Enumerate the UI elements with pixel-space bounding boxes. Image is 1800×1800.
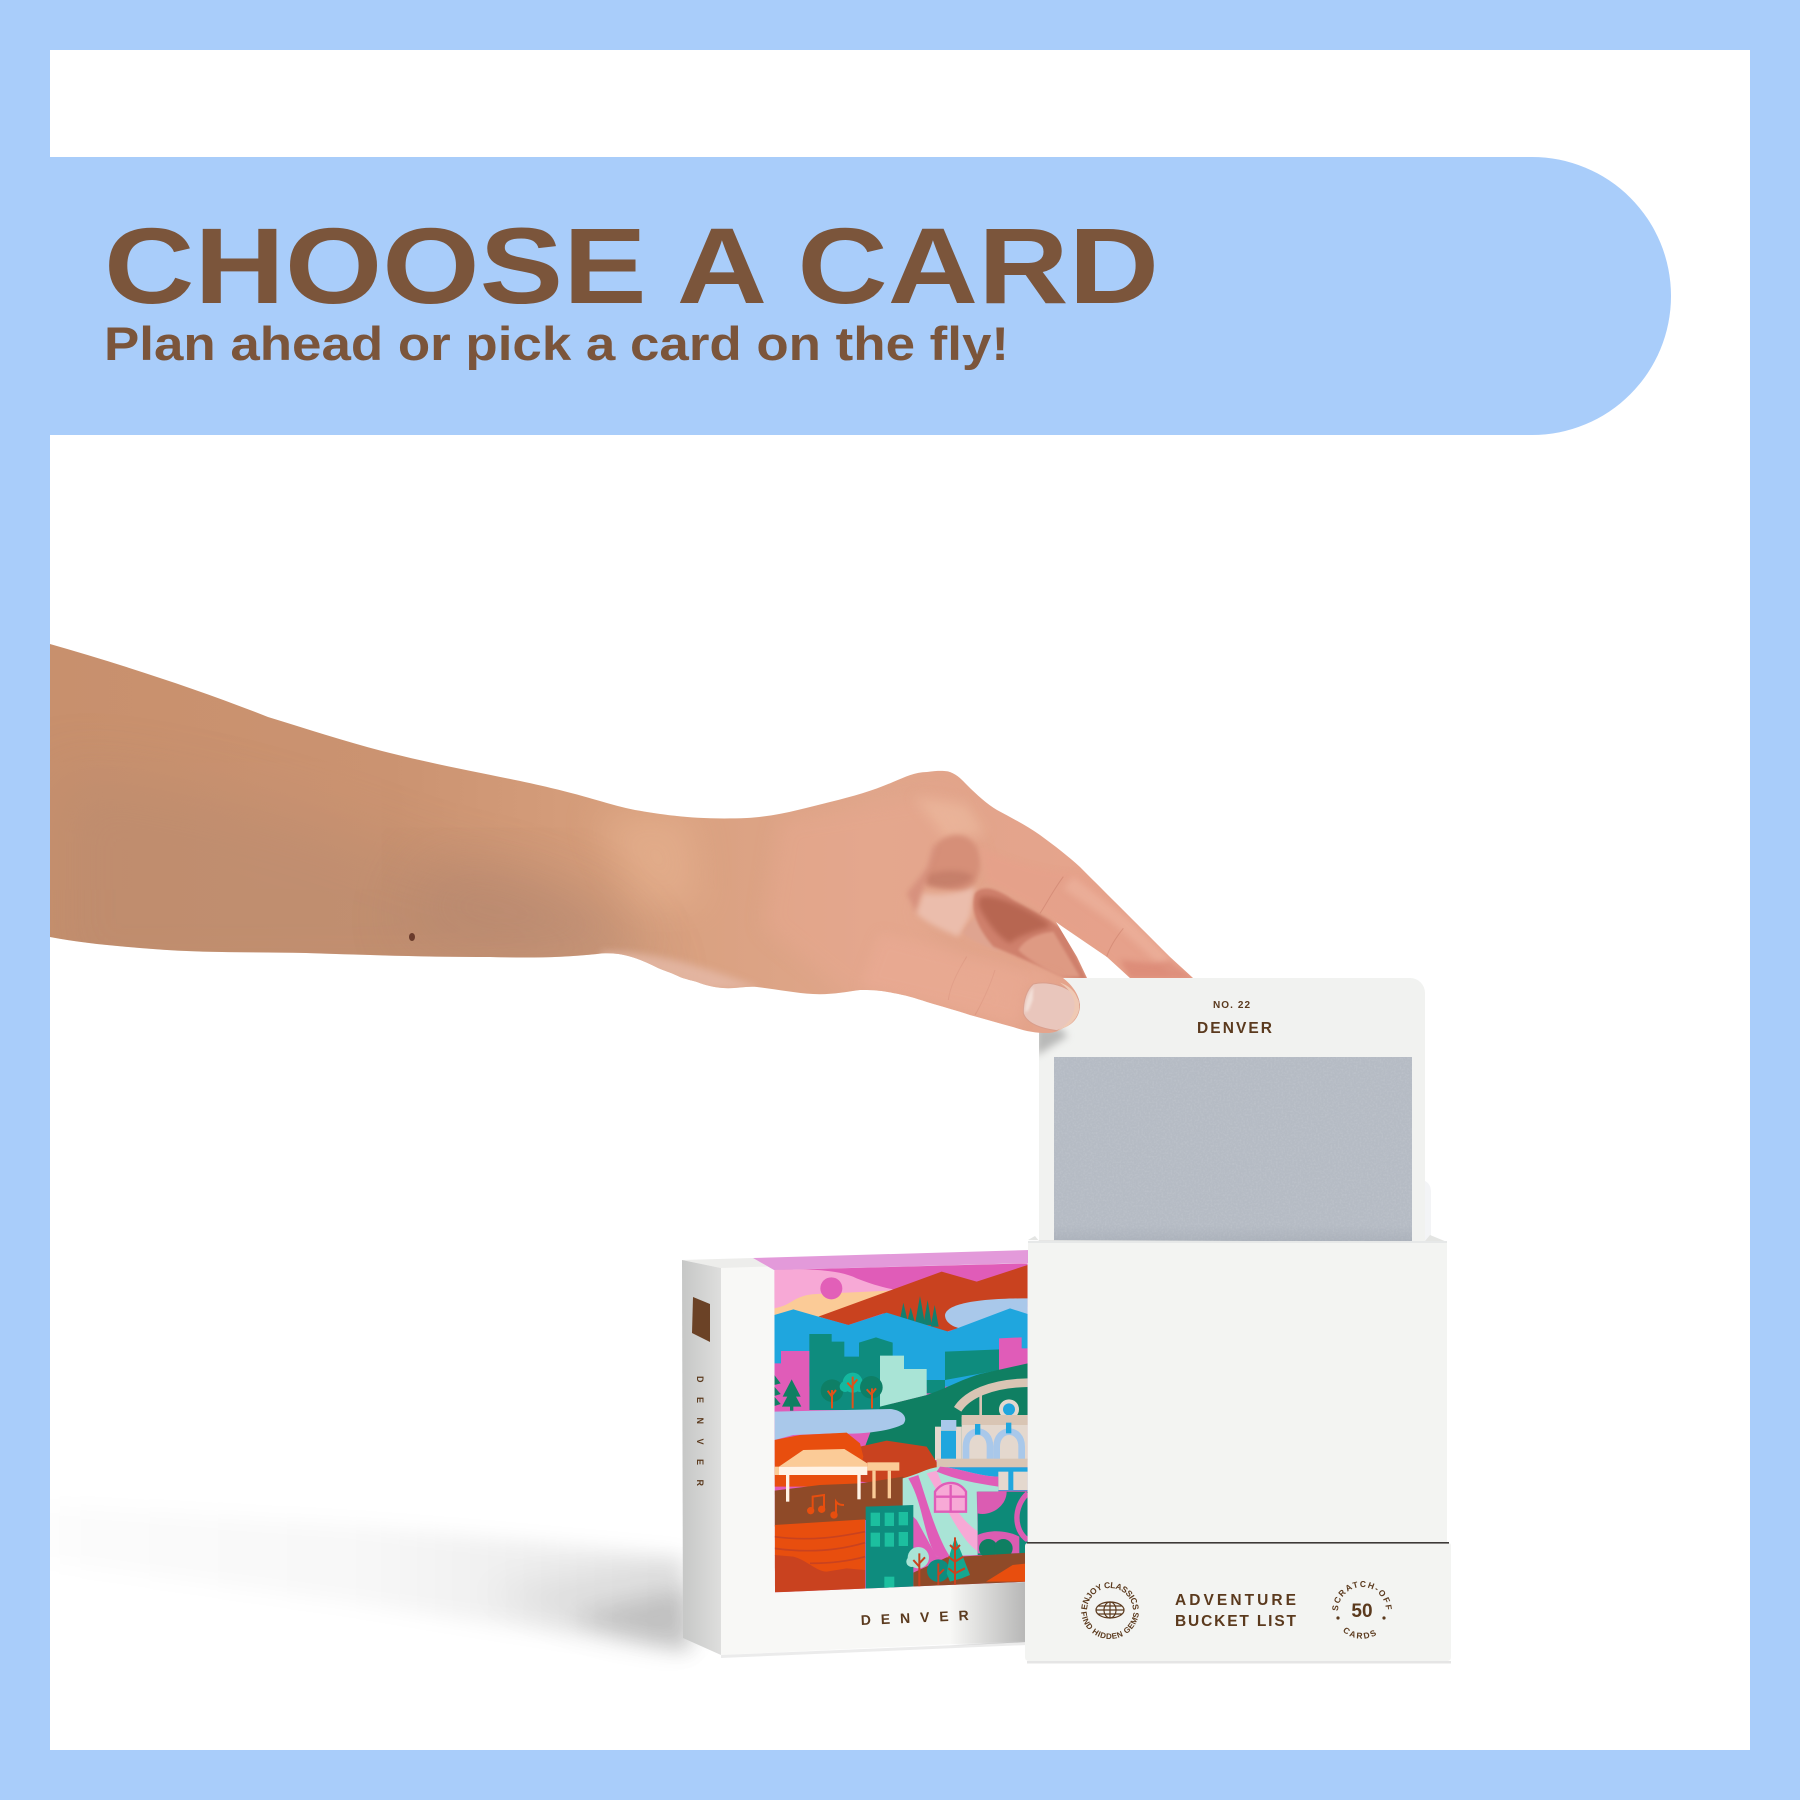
- right skyline: [927, 1349, 1000, 1393]
- inner palm light: [917, 887, 975, 937]
- mole: [409, 933, 415, 941]
- brown ground right: [913, 1553, 1028, 1588]
- pale lake: [945, 1298, 1028, 1328]
- top edge of artwork: [753, 1250, 1030, 1270]
- back card edge: [1420, 1180, 1431, 1245]
- left skyline: [809, 1334, 893, 1410]
- badge: 50 scratch-off cards: SCRATCH-OFF: [1332, 1581, 1392, 1611]
- badge: 50 scratch-off cards: CARDS: [1344, 1628, 1376, 1639]
- station: [962, 1417, 1028, 1462]
- side label: DENVER: [695, 1376, 705, 1486]
- arched window: [935, 1483, 966, 1512]
- middle finger: [973, 888, 1087, 980]
- orange rock: [774, 1433, 863, 1487]
- mint building: [880, 1356, 927, 1407]
- rust mountain: [818, 1265, 1028, 1332]
- colour swatch on box side: [692, 1297, 710, 1342]
- silver scratch panel: [1054, 1057, 1412, 1245]
- forearm shading: [78, 812, 610, 958]
- striped plaza: [903, 1467, 998, 1557]
- header band: [50, 157, 1671, 435]
- thumb nail: [1023, 983, 1079, 1031]
- teal building: [866, 1505, 913, 1590]
- box front face: [721, 1258, 1040, 1655]
- box bottom contact shadow: [721, 1642, 1027, 1658]
- badge: 50 scratch-off cards: 50: [1351, 1601, 1373, 1622]
- front shade from sleeve: [950, 1582, 1027, 1646]
- title: CHOOSE A CARD: [104, 205, 1159, 326]
- foreground trees: [908, 1547, 929, 1568]
- subtitle: Plan ahead or pick a card on the fly!: [104, 317, 1009, 370]
- box side panel: [682, 1260, 721, 1655]
- index finger: [1058, 923, 1188, 978]
- card number: NO. 22: [1213, 1000, 1250, 1011]
- knuckle creases: [948, 877, 1123, 1015]
- hand warm tones: [872, 990, 925, 1002]
- inner palm shadow: [923, 835, 980, 893]
- badge: enjoy classics: ENJOY CLASSICS: [1081, 1582, 1139, 1610]
- orange terraces: [774, 1519, 865, 1572]
- front label: DENVER: [860, 1607, 969, 1628]
- conifers left: [774, 1375, 801, 1411]
- brown ground: [774, 1477, 903, 1527]
- thumb highlight: [948, 956, 996, 1014]
- arm and hand: [50, 640, 1200, 1040]
- badge: enjoy classics: [1081, 1582, 1139, 1639]
- ground shadow: [0, 1490, 690, 1652]
- round trees: [821, 1379, 843, 1402]
- product name: BUCKET LIST: [1175, 1613, 1297, 1630]
- card city: DENVER: [1197, 1020, 1272, 1037]
- green hill: [860, 1363, 1028, 1460]
- product name: [1175, 1592, 1297, 1630]
- product name: ADVENTURE: [1175, 1592, 1296, 1609]
- big lake: [774, 1409, 905, 1440]
- ornate panel: [978, 1492, 1028, 1555]
- music notes: [808, 1495, 844, 1518]
- illustration: Denver landscape: [773, 1260, 1030, 1593]
- tray front: [1025, 1542, 1451, 1664]
- pavilion: [779, 1449, 867, 1467]
- deck box: [682, 1250, 1040, 1658]
- blue hills: [774, 1308, 1028, 1387]
- sleeve: [1028, 1235, 1447, 1543]
- shadow under thumb: [1036, 1026, 1068, 1056]
- badge: enjoy classics: FIND HIDDEN GEMS: [1081, 1612, 1139, 1639]
- rust rock: [860, 1441, 940, 1485]
- scratch card: [1036, 978, 1425, 1250]
- box top face: [682, 1258, 774, 1270]
- badge: 50 scratch-off cards: [1332, 1581, 1392, 1639]
- sky pink: [774, 1269, 900, 1320]
